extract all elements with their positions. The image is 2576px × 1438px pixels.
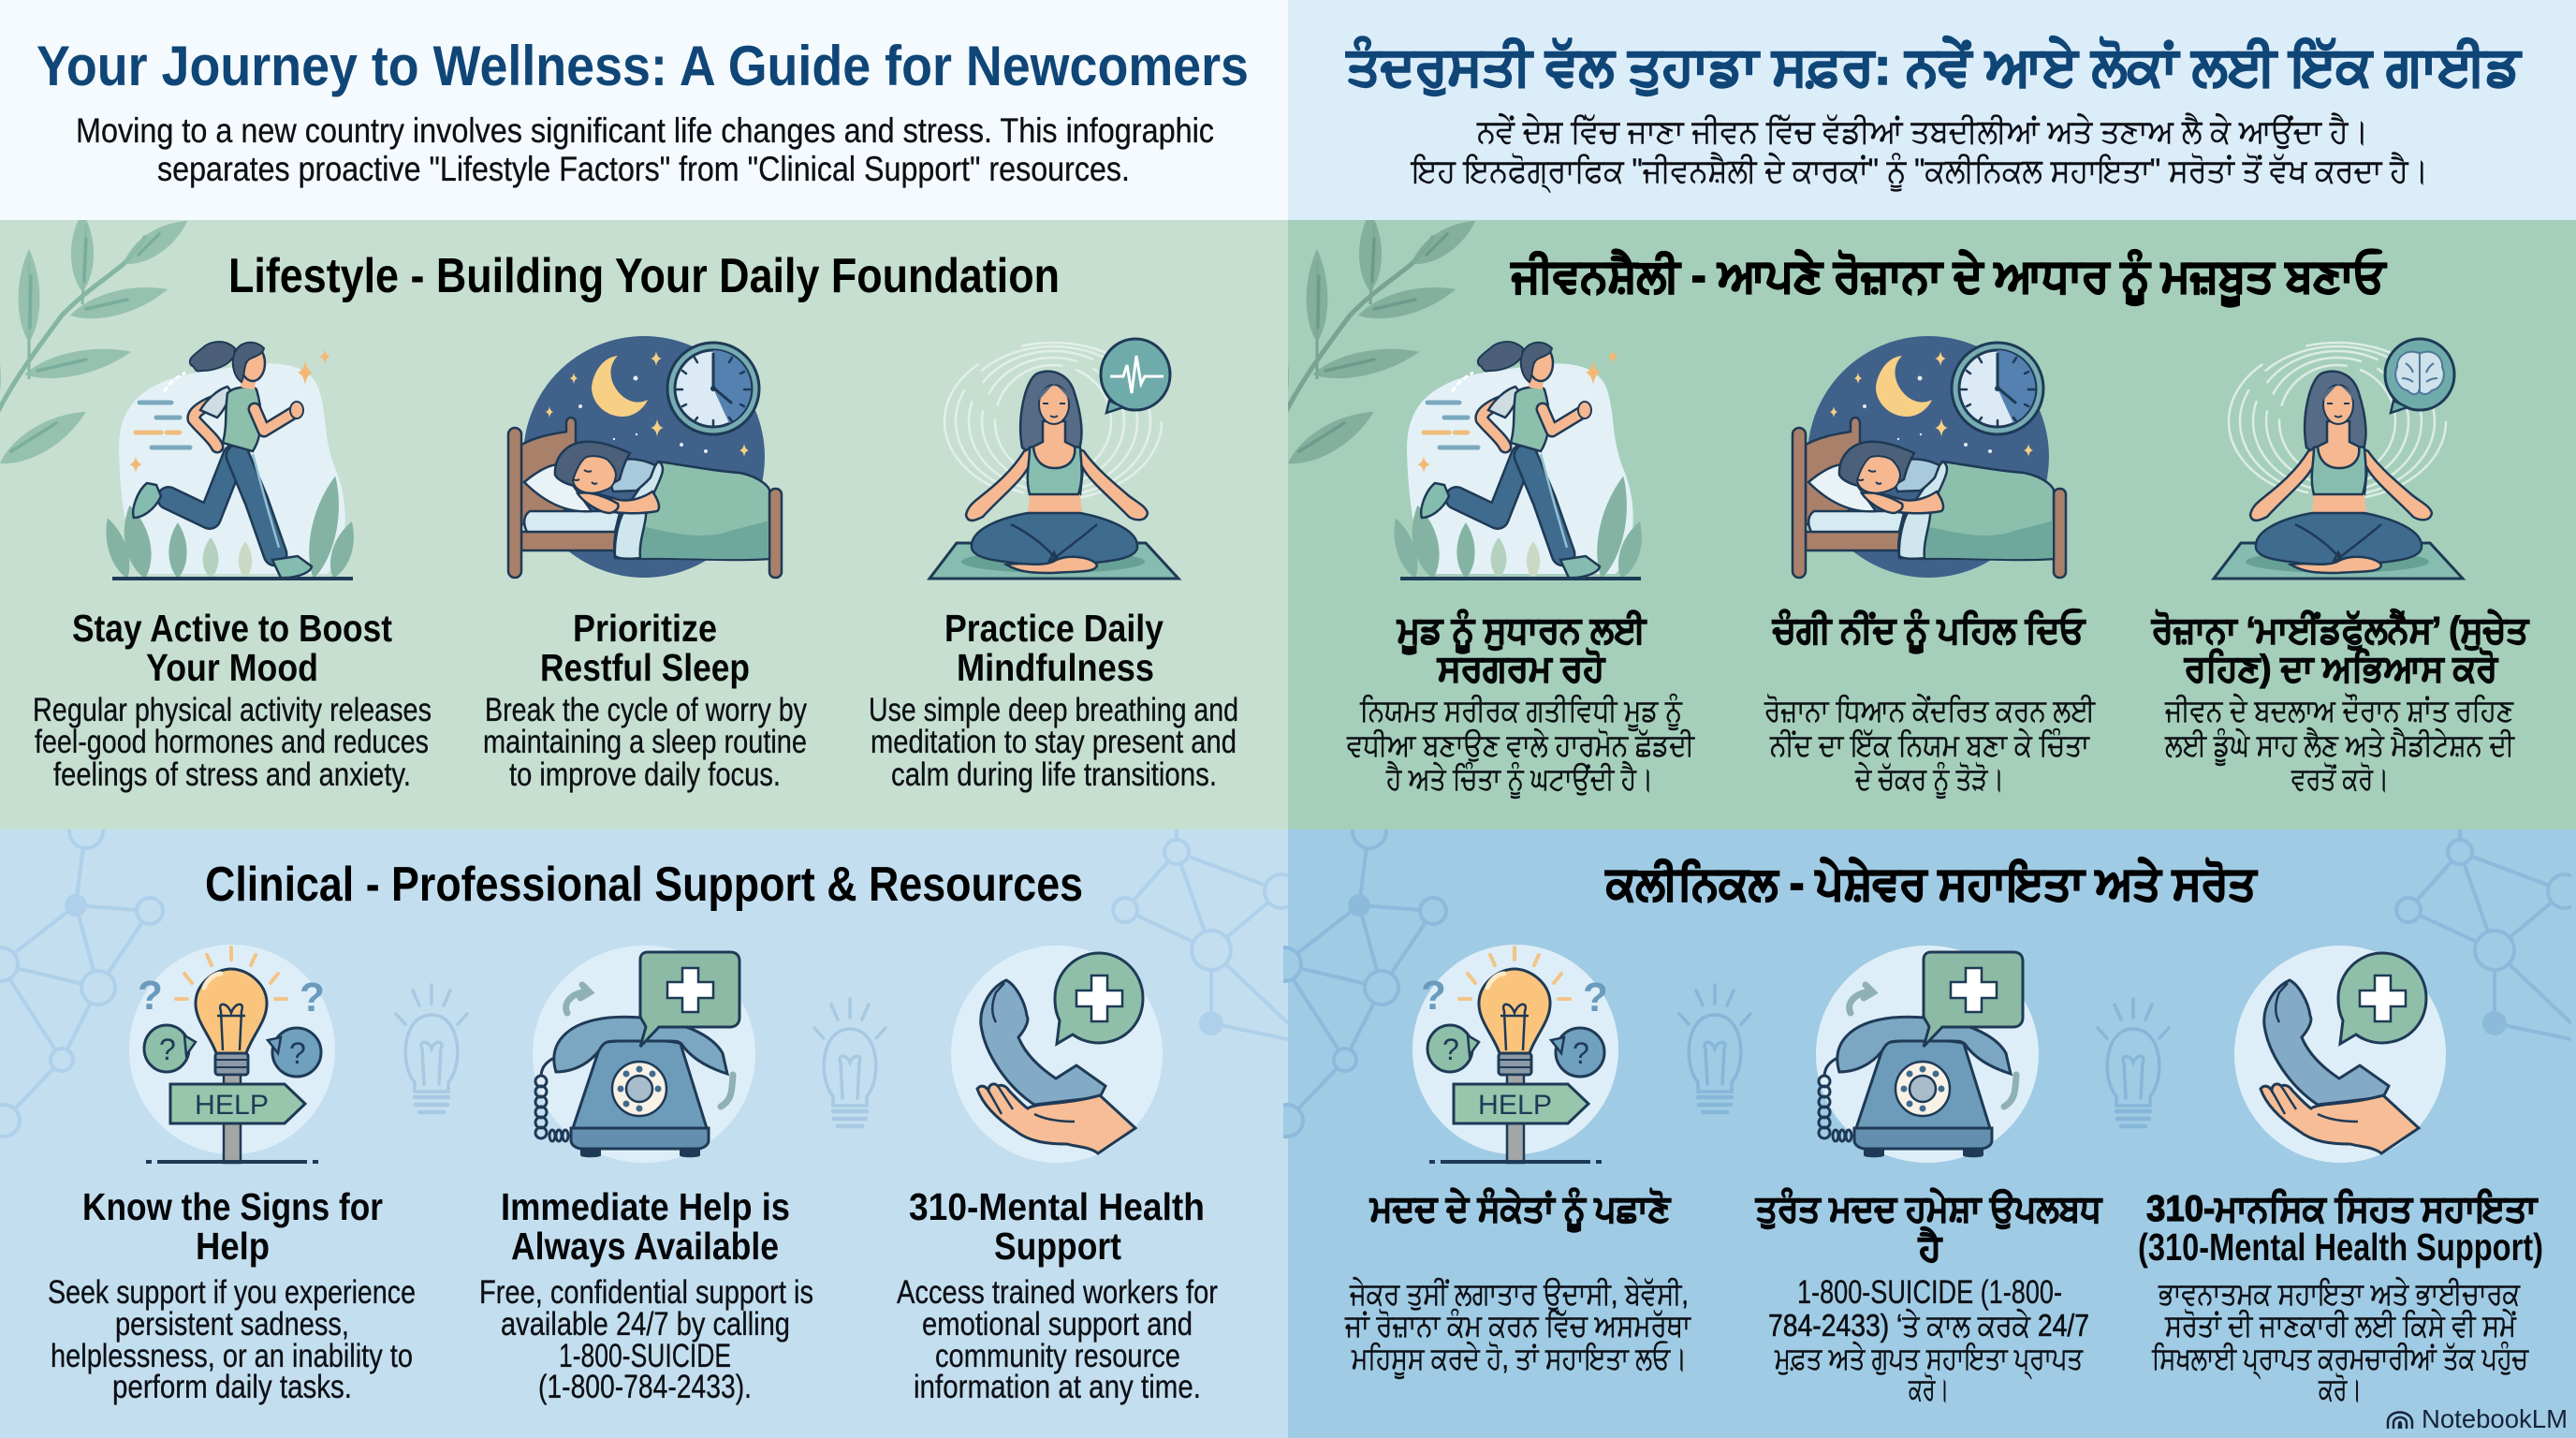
card: stay active: Regular physical activity releases — [33, 692, 432, 728]
panel: english lifestyle — [33, 249, 1238, 793]
card: ਤੁਰੰਤ ਮਦਦ: 784-2433) ‘ਤੇ ਕਾਲ ਕਰਕੇ 24/7 — [1768, 1308, 2089, 1343]
card: immediate help: 1-800-SUICIDE — [559, 1338, 731, 1374]
card: 310 ਮਾਨਸਿਕ ਸਿਹਤ — [2138, 1189, 2543, 1406]
english intro: separates proactive "Lifestyle Factors" from "Clinical Support" resources. — [157, 150, 1130, 188]
card: know the signs — [48, 1185, 416, 1405]
punjabi intro — [1410, 112, 2428, 193]
punjabi intro: ਇਹ ਇਨਫੋਗ੍ਰਾਫਿਕ "ਜੀਵਨਸ਼ੈਲੀ ਦੇ ਕਾਰਕਾਂ" ਨੂੰ "ਕਲੀਨਿਕਲ ਸਹਾਇਤਾ" ਸਰੋਤਾਂ ਤੋਂ ਵੱਖ ਕਰਦਾ ਹੈ। — [1410, 152, 2428, 193]
english header — [37, 35, 1249, 188]
card: mindfulness: Practice Daily — [944, 607, 1164, 650]
icon: help signpost: ? — [300, 975, 325, 1020]
icon: help signpost: ? — [289, 1036, 306, 1070]
english title: Your Journey to Wellness: A Guide for Newcomers — [37, 35, 1249, 97]
lifestyle heading: Lifestyle - Building Your Daily Foundation — [228, 249, 1060, 303]
decorative network left — [0, 814, 1298, 1137]
card: ਮਾਈਂਡਫੁੱਲਨੈੱਸ: ਰਹਿਣ) ਦਾ ਅਭਿਆਸ ਕਰੋ — [2184, 647, 2499, 689]
card: ਤੁਰੰਤ ਮਦਦ: ਹੈ — [1918, 1226, 1943, 1269]
icon: hand with phone — [2234, 946, 2446, 1163]
panel: english clinical — [48, 858, 1218, 1405]
icon: help signpost: ? — [1442, 1033, 1459, 1066]
card: 310 mental health: 310-Mental Health — [909, 1185, 1205, 1228]
clinical heading: Clinical - Professional Support & Resources — [205, 858, 1083, 912]
card: stay active: feelings of stress and anxiety. — [53, 756, 411, 793]
card: know the signs: helplessness, or an inability to — [51, 1338, 413, 1374]
card: ਤੁਰੰਤ ਮਦਦ: ਕਰੋ। — [1908, 1372, 1949, 1406]
right background panel — [1288, 0, 2576, 1438]
card: stay active: Stay Active to Boost — [72, 607, 392, 650]
card: ਮਾਈਂਡਫੁੱਲਨੈੱਸ — [2151, 609, 2530, 796]
punjabi lifestyle heading: ਜੀਵਨਸ਼ੈਲੀ - ਆਪਣੇ ਰੋਜ਼ਾਨਾ ਦੇ ਆਧਾਰ ਨੂੰ ਮਜ਼ਬੂਤ ਬਣਾਓ — [1510, 249, 2387, 307]
card: 310 mental health: emotional support and — [922, 1306, 1193, 1343]
english intro — [76, 111, 1214, 188]
left background panel — [0, 0, 1288, 1438]
card: 310 mental health: Support — [994, 1225, 1121, 1268]
punjabi clinical heading: ਕਲੀਨਿਕਲ - ਪੇਸ਼ੇਵਰ ਸਹਾਇਤਾ ਅਤੇ ਸਰੋਤ — [1604, 858, 2258, 909]
icon: rotary phone — [1816, 946, 2039, 1163]
card: restful sleep: Restful Sleep — [540, 646, 750, 689]
card: immediate help: available 24/7 by calling — [501, 1306, 790, 1343]
card: immediate help: Free, confidential support is — [479, 1274, 813, 1311]
card: immediate help — [479, 1185, 813, 1405]
card: ਮੂਡ: ਮੂਡ ਨੂੰ ਸੁਧਾਰਨ ਲਈ — [1397, 609, 1647, 655]
card: mindfulness: calm during life transitions. — [891, 756, 1217, 793]
card: mindfulness: Mindfulness — [957, 646, 1154, 689]
card: immediate help: Always Available — [511, 1225, 779, 1268]
card: ਸੰਕੇਤ: ਮਹਿਸੂਸ ਕਰਦੇ ਹੋ, ਤਾਂ ਸਹਾਇਤਾ ਲਓ। — [1351, 1341, 1687, 1379]
card: ਮਾਈਂਡਫੁੱਲਨੈੱਸ: ਲਈ ਡੂੰਘੇ ਸਾਹ ਲੈਣ ਅਤੇ ਮੈਡੀਟੇਸ਼ਨ ਦੀ — [2164, 727, 2515, 766]
punjabi title: ਤੰਦਰੁਸਤੀ ਵੱਲ ਤੁਹਾਡਾ ਸਫ਼ਰ: ਨਵੇਂ ਆਏ ਲੋਕਾਂ ਲਈ ਇੱਕ ਗਾਈਡ — [1345, 36, 2523, 96]
card: ਮਾਈਂਡਫੁੱਲਨੈੱਸ: ਵਰਤੋਂ ਕਰੋ। — [2291, 761, 2389, 796]
icon: faint bulb — [814, 999, 886, 1126]
icon: runner — [99, 342, 360, 581]
card: ਮੂਡ: ਹੈ ਅਤੇ ਚਿੰਤਾ ਨੂੰ ਘਟਾਉਂਦੀ ਹੈ। — [1385, 761, 1653, 799]
icon: help signpost: ? — [1573, 1036, 1589, 1070]
icon: meditation — [929, 339, 1178, 579]
card: ਮੂਡ: ਸਰਗਰਮ ਰਹੋ — [1437, 647, 1606, 689]
card: ਨੀਂਦ: ਦੇ ਚੱਕਰ ਨੂੰ ਤੋੜੋ। — [1854, 761, 2004, 799]
icon: faint bulb — [396, 985, 467, 1112]
card: ਨੀਂਦ: ਚੰਗੀ ਨੀਂਦ ਨੂੰ ਪਹਿਲ ਦਿਓ — [1772, 609, 2086, 654]
card: know the signs: Know the Signs for — [82, 1185, 383, 1228]
icon: sleeping in bed — [508, 336, 782, 578]
english intro: Moving to a new country involves significant life changes and stress. This infographic — [76, 111, 1214, 150]
icon: help signpost: ? — [1421, 973, 1446, 1019]
icon: runner — [1387, 342, 1648, 581]
card: ਤੁਰੰਤ ਮਦਦ: ਤੁਰੰਤ ਮਦਦ ਹਮੇਸ਼ਾ ਉਪਲਬਧ — [1755, 1187, 2102, 1229]
icon: help signpost — [1412, 945, 1618, 1163]
card: know the signs: Help — [196, 1225, 270, 1268]
decorative network right — [1267, 814, 2576, 1137]
icon: help signpost: HELP — [195, 1090, 269, 1121]
punjabi header — [1345, 36, 2523, 193]
decorative leaves right — [1268, 212, 1482, 475]
card: ਮੂਡ — [1346, 609, 1695, 799]
card: ਸੰਕੇਤ: ਮਦਦ ਦੇ ਸੰਕੇਤਾਂ ਨੂੰ ਪਛਾਣੋ — [1369, 1187, 1671, 1233]
icon: faint bulb — [2098, 999, 2169, 1126]
card: ਸੰਕੇਤ — [1344, 1187, 1691, 1379]
card: know the signs: perform daily tasks. — [112, 1369, 352, 1405]
card: ਮੂਡ: ਨਿਯਮਤ ਸਰੀਰਕ ਗਤੀਵਿਧੀ ਮੂਡ ਨੂੰ — [1359, 693, 1682, 731]
card: 310 mental health — [897, 1185, 1218, 1405]
card: ਨੀਂਦ: ਰੋਜ਼ਾਨਾ ਧਿਆਨ ਕੇਂਦਰਿਤ ਕਰਨ ਲਈ — [1764, 693, 2096, 727]
card: immediate help: Immediate Help is — [501, 1185, 790, 1228]
icon: hand with phone — [951, 946, 1163, 1163]
card: ਤੁਰੰਤ ਮਦਦ: 1-800-SUICIDE (1-800- — [1797, 1274, 2062, 1311]
card: ਤੁਰੰਤ ਮਦਦ — [1755, 1187, 2102, 1406]
icon: sleeping in bed — [1793, 336, 2066, 578]
card: restful sleep: Prioritize — [573, 607, 717, 650]
card: ਨੀਂਦ: ਨੀਂਦ ਦਾ ਇੱਕ ਨਿਯਮ ਬਣਾ ਕੇ ਚਿੰਤਾ — [1769, 727, 2090, 762]
card: know the signs: persistent sadness, — [115, 1306, 349, 1343]
card: know the signs: Seek support if you experience — [48, 1274, 416, 1311]
icon: meditation with brain — [2214, 339, 2463, 579]
card: ਮਾਈਂਡਫੁੱਲਨੈੱਸ: ਜੀਵਨ ਦੇ ਬਦਲਾਅ ਦੌਰਾਨ ਸ਼ਾਂਤ ਰਹਿਣ — [2164, 693, 2514, 727]
card: mindfulness: Use simple deep breathing and — [869, 692, 1238, 728]
panel: punjabi clinical — [1344, 858, 2543, 1406]
card: restful sleep: Break the cycle of worry by — [485, 692, 807, 728]
card: stay active — [33, 607, 432, 793]
card: ਮੂਡ: ਵਧੀਆ ਬਣਾਉਣ ਵਾਲੇ ਹਾਰਮੋਨ ਛੱਡਦੀ — [1346, 727, 1695, 762]
card: ਸੰਕੇਤ: ਜੇਕਰ ਤੁਸੀਂ ਲਗਾਤਾਰ ਉਦਾਸੀ, ਬੇਵੱਸੀ, — [1349, 1276, 1689, 1311]
card: restful sleep: to improve daily focus. — [509, 756, 781, 793]
card: 310 ਮਾਨਸਿਕ ਸਿਹਤ: 310-ਮਾਨਸਿਕ ਸਿਹਤ ਸਹਾਇਤਾ — [2146, 1189, 2539, 1229]
card: restful sleep: maintaining a sleep routine — [483, 724, 807, 760]
icon: help signpost: ? — [159, 1033, 176, 1066]
card: restful sleep — [483, 607, 807, 793]
card: 310 ਮਾਨਸਿਕ ਸਿਹਤ: ਕਰੋ। — [2318, 1372, 2362, 1406]
card: 310 mental health: information at any time. — [914, 1369, 1201, 1405]
card: ਸੰਕੇਤ: ਜਾਂ ਰੋਜ਼ਾਨਾ ਕੰਮ ਕਰਨ ਵਿੱਚ ਅਸਮਰੱਥਾ — [1344, 1308, 1691, 1343]
punjabi intro: ਨਵੇਂ ਦੇਸ਼ ਵਿੱਚ ਜਾਣਾ ਜੀਵਨ ਵਿੱਚ ਵੱਡੀਆਂ ਤਬਦੀਲੀਆਂ ਅਤੇ ਤਣਾਅ ਲੈ ਕੇ ਆਉਂਦਾ ਹੈ। — [1476, 112, 2368, 150]
notebooklm watermark: NotebookLM — [2422, 1404, 2568, 1433]
icon: help signpost: ? — [138, 973, 163, 1019]
card: ਨੀਂਦ — [1764, 609, 2096, 799]
icon: help signpost: ? — [1583, 975, 1608, 1020]
icon: help signpost — [129, 945, 335, 1163]
card: 310 mental health: community resource — [935, 1338, 1180, 1374]
icon: faint bulb — [1679, 985, 1750, 1112]
icon: help signpost: HELP — [1478, 1090, 1552, 1121]
panel: punjabi lifestyle — [1346, 249, 2530, 799]
card: stay active: feel-good hormones and reduces — [35, 724, 429, 760]
icon: rotary phone — [533, 946, 755, 1163]
card: immediate help: (1-800-784-2433). — [538, 1369, 752, 1405]
card: mindfulness — [869, 607, 1238, 793]
card: stay active: Your Mood — [146, 646, 318, 689]
card: ਮਾਈਂਡਫੁੱਲਨੈੱਸ: ਰੋਜ਼ਾਨਾ ‘ਮਾਈਂਡਫੁੱਲਨੈੱਸ’ (ਸੁਚੇਤ — [2151, 609, 2530, 651]
card: 310 mental health: Access trained workers for — [897, 1274, 1218, 1311]
card: ਤੁਰੰਤ ਮਦਦ: ਮੁਫ਼ਤ ਅਤੇ ਗੁਪਤ ਸਹਾਇਤਾ ਪ੍ਰਾਪਤ — [1774, 1341, 2084, 1379]
card: mindfulness: meditation to stay present and — [871, 724, 1237, 760]
decorative leaves left — [0, 212, 194, 475]
